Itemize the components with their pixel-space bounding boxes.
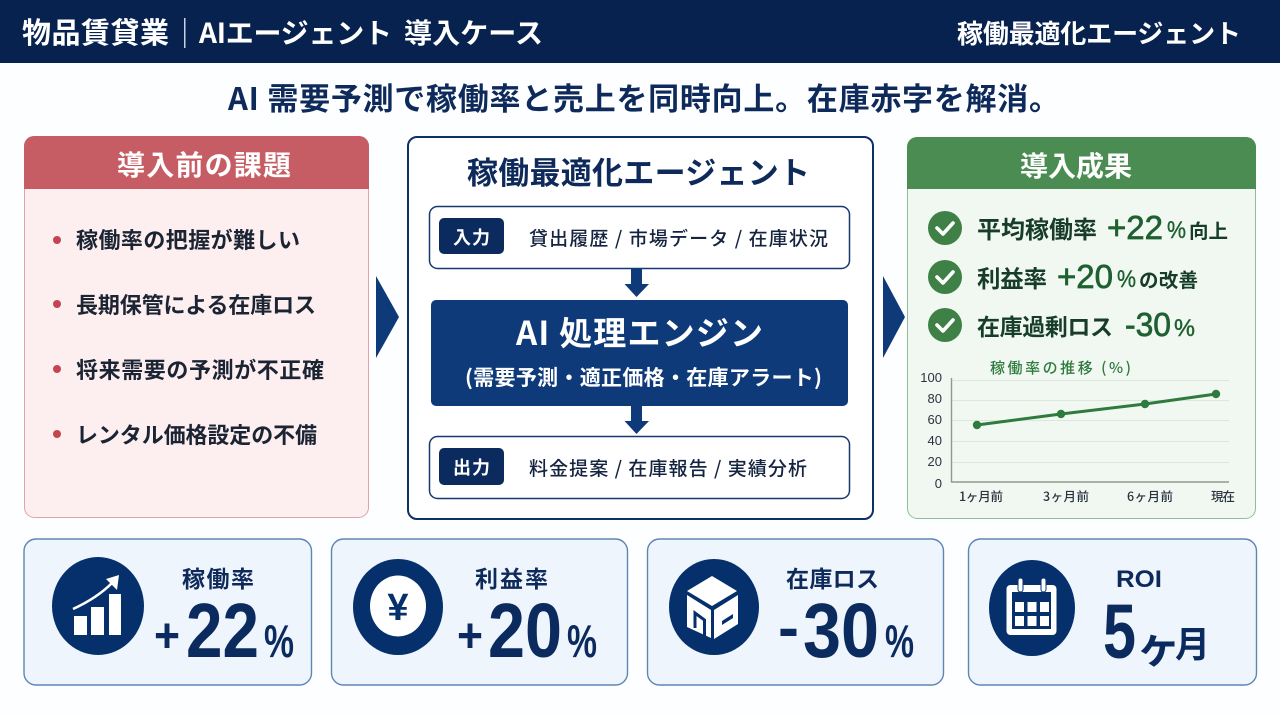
header title bbox=[22, 10, 543, 52]
KPI card: ROI bbox=[968, 539, 1256, 685]
output row: 料金提案 / 在庫報告 / 実績分析 bbox=[529, 454, 807, 481]
value: + bbox=[154, 610, 180, 663]
value bbox=[154, 588, 294, 674]
challenge list: 稼働率の把握が難しい bbox=[76, 223, 300, 255]
value: 20 bbox=[488, 588, 562, 674]
label: 利益率 bbox=[475, 560, 548, 594]
input row: 入力 bbox=[453, 224, 490, 250]
KPI card: utilisation bbox=[24, 539, 312, 685]
value: 30 bbox=[803, 588, 879, 674]
panel: results bbox=[907, 137, 1256, 518]
arrow: engine to output bbox=[624, 406, 649, 434]
KPI card: profit bbox=[332, 539, 628, 685]
y axis labels: 80 bbox=[928, 391, 942, 406]
panel: before challenges bbox=[24, 136, 369, 518]
results heading: 導入成果 bbox=[1020, 145, 1132, 185]
x axis labels bbox=[959, 486, 1235, 505]
header bar bbox=[0, 0, 1280, 63]
output row: 出力 bbox=[453, 454, 490, 480]
result 1 bbox=[928, 209, 1228, 246]
icon: yen coin bbox=[353, 559, 443, 655]
label: 稼働率 bbox=[182, 560, 254, 594]
result 3: -30 bbox=[1125, 306, 1171, 343]
data line bbox=[973, 390, 1220, 429]
icon: calendar bbox=[989, 560, 1075, 656]
input row: 貸出履歴 / 市場データ / 在庫状況 bbox=[529, 224, 828, 251]
value: + bbox=[457, 610, 483, 663]
AI engine box: (需要予測・適正価格・在庫アラート) bbox=[465, 362, 822, 392]
chart title: 稼働率の推移 (%) bbox=[990, 357, 1131, 378]
header title: 導入ケース bbox=[404, 12, 543, 52]
icon: box bbox=[669, 559, 759, 655]
headline: AI 需要予測で稼働率と売上を同時向上。在庫赤字を解消。 bbox=[227, 74, 1060, 119]
result 1: 平均稼働率 bbox=[977, 210, 1097, 245]
line chart: utilisation trend bbox=[920, 357, 1235, 505]
result 3: % bbox=[1174, 315, 1195, 342]
arrow: challenges to agent bbox=[376, 276, 399, 358]
result 1: +22 bbox=[1107, 209, 1163, 246]
panel: agent bbox=[408, 137, 873, 519]
result 3: 在庫過剰ロス bbox=[977, 308, 1113, 342]
arrow: input to engine bbox=[624, 268, 649, 297]
result 1: % bbox=[1167, 217, 1186, 244]
result 2: の改善 bbox=[1139, 264, 1198, 293]
x axis labels: 3ヶ月前 bbox=[1043, 486, 1089, 505]
value bbox=[457, 588, 597, 674]
value bbox=[778, 588, 914, 674]
y axis labels: 60 bbox=[928, 412, 942, 427]
value: ヶ bbox=[1136, 611, 1180, 675]
result 2: % bbox=[1117, 266, 1136, 293]
value bbox=[1103, 589, 1210, 675]
x axis labels: 現在 bbox=[1211, 486, 1235, 505]
y axis labels: 0 bbox=[935, 476, 942, 491]
icon: rising chart bbox=[52, 557, 144, 655]
AI engine box: AI 処理エンジン bbox=[515, 307, 763, 355]
x axis labels: 1ヶ月前 bbox=[959, 486, 1003, 505]
output row bbox=[430, 436, 850, 498]
value: % bbox=[567, 615, 597, 667]
result 1: 向上 bbox=[1189, 215, 1228, 244]
y axis labels: 40 bbox=[928, 433, 942, 448]
label: ROI bbox=[1116, 566, 1162, 593]
challenge list: 長期保管による在庫ロス bbox=[76, 288, 316, 320]
result 3 bbox=[928, 306, 1195, 343]
arrow: agent to results bbox=[883, 276, 905, 358]
y axis labels: 100 bbox=[920, 370, 942, 385]
header title: AIエージェント bbox=[198, 12, 392, 52]
y axis labels: 20 bbox=[928, 454, 942, 469]
value: 月 bbox=[1175, 616, 1210, 668]
header title: 物品賃貸業 bbox=[22, 10, 169, 52]
agent heading: 稼働最適化エージェント bbox=[467, 148, 810, 193]
result 2 bbox=[928, 258, 1198, 295]
AI engine box bbox=[431, 300, 848, 406]
y axis labels bbox=[920, 370, 942, 491]
input row bbox=[430, 206, 850, 268]
header agent name: 稼働最適化エージェント bbox=[957, 14, 1241, 51]
value: % bbox=[885, 615, 914, 667]
icon: yen coin: ¥ bbox=[387, 587, 409, 629]
challenge list: レンタル価格設定の不備 bbox=[76, 418, 317, 450]
label: 在庫ロス bbox=[786, 560, 879, 594]
value: 5 bbox=[1103, 589, 1136, 675]
challenge list bbox=[53, 223, 324, 450]
value: % bbox=[264, 615, 294, 667]
panel heading: 導入前の課題 bbox=[117, 144, 291, 184]
KPI card: inventory loss bbox=[648, 539, 944, 685]
challenge list: 将来需要の予測が不正確 bbox=[76, 353, 324, 385]
result 2: 利益率 bbox=[977, 260, 1047, 294]
result 2: +20 bbox=[1057, 258, 1113, 295]
value: 22 bbox=[186, 588, 259, 674]
x axis labels: 6ヶ月前 bbox=[1127, 486, 1173, 505]
value: - bbox=[778, 594, 799, 661]
